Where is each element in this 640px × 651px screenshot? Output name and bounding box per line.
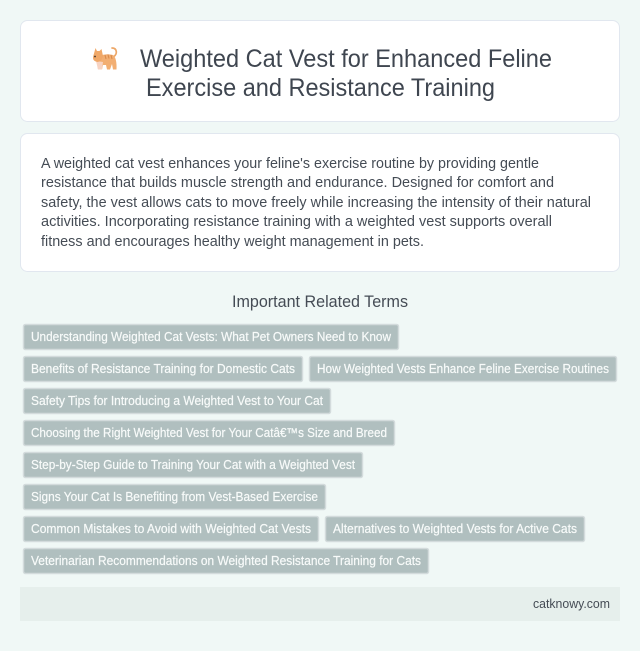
tag: choosing: Choosing the Right Weighted Vest for Your Catâ€™s Size and Breed — [31, 426, 387, 440]
tag: mistakes: Common Mistakes to Avoid with Weighted Cat Vests — [31, 522, 311, 536]
tag: signs — [24, 484, 326, 510]
tag: routines: How Weighted Vests Enhance Feline Exercise Routines — [317, 362, 609, 376]
text block: introduction: A weighted cat vest enhances your feline's exercise routine by providing gentle — [41, 156, 539, 172]
tag: alternatives — [326, 516, 584, 542]
text block: introduction: fitness and encourages healthy weight management in pets. — [41, 234, 424, 250]
tag: guide: Step-by-Step Guide to Training Your Cat with a Weighted Vest — [31, 458, 355, 472]
tag: safety: Safety Tips for Introducing a Weighted Vest to Your Cat — [31, 394, 323, 408]
tag: benefits — [24, 356, 302, 382]
title: Weighted Cat Vest for Enhanced Feline — [140, 45, 552, 73]
tag: choosing — [24, 420, 394, 446]
text block: introduction — [41, 156, 591, 250]
title: Exercise and Resistance Training — [146, 74, 495, 102]
panel: title card — [20, 20, 620, 122]
tag: guide — [24, 452, 362, 478]
tag: veterinarian — [24, 548, 428, 574]
tag: mistakes — [24, 516, 318, 542]
tag: veterinarian: Veterinarian Recommendations on Weighted Resistance Training for Cats — [31, 554, 421, 568]
text block: introduction: resistance that builds muscle strength and endurance. Designed for comfort and — [41, 175, 554, 191]
footer: catknowy.com — [533, 597, 610, 611]
text block: introduction: activities. Incorporating resistance training with a weighted vest supports overall — [41, 214, 552, 230]
panel: related terms tags — [24, 324, 616, 574]
tag: understanding — [24, 324, 398, 350]
tag: safety — [24, 388, 330, 414]
panel: introduction — [20, 134, 620, 272]
tag: routines — [310, 356, 616, 382]
tag: benefits: Benefits of Resistance Training for Domestic Cats — [31, 362, 295, 376]
tag: alternatives: Alternatives to Weighted Vests for Active Cats — [333, 522, 577, 536]
tag: understanding: Understanding Weighted Cat Vests: What Pet Owners Need to Know — [31, 330, 392, 344]
footer — [20, 587, 620, 621]
title — [140, 45, 552, 102]
text block: introduction: safety, the vest allows cats to move freely while increasing the intensity of their natural — [41, 195, 591, 211]
heading: related terms: Important Related Terms — [232, 293, 408, 311]
icon: cat — [93, 48, 117, 70]
tag: signs: Signs Your Cat Is Benefiting from Vest-Based Exercise — [31, 490, 318, 504]
